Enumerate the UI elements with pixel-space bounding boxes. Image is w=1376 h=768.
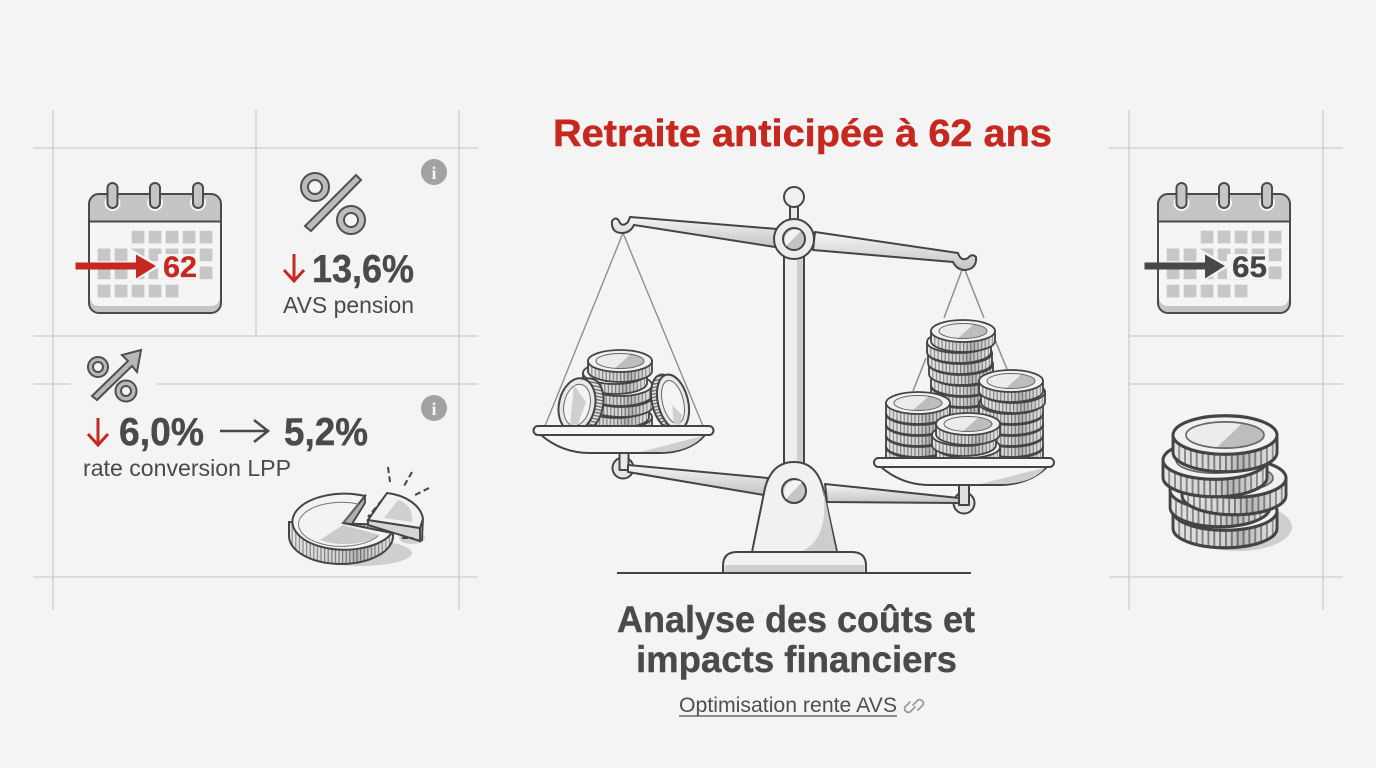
icon: red down arrow (88, 418, 108, 445)
right strings (913, 270, 1007, 391)
arrow to 62 (76, 249, 161, 283)
link text: Optimisation rente AVS (679, 694, 897, 717)
infographic canvas (33, 110, 1343, 717)
base line (617, 572, 971, 574)
upper beam right (813, 232, 976, 270)
left pan coins (557, 349, 690, 425)
panel: LPP conversion rate (83, 350, 447, 566)
icon: info: i (431, 163, 437, 183)
value 13,6%: 13,6% (312, 248, 414, 291)
heading: analysis (617, 599, 975, 680)
panel: calendar age 65 (1144, 183, 1290, 313)
heading: analysis: Analyse des coûts et (617, 599, 975, 640)
arrow between rates (220, 420, 268, 442)
lower beam right (825, 484, 974, 514)
left grid frame (33, 110, 478, 610)
icon: red down arrow (284, 254, 304, 281)
icon: info (421, 395, 447, 421)
lower beam left (612, 452, 768, 495)
label rate conversion LPP: rate conversion LPP (83, 455, 291, 481)
top knob (784, 187, 804, 223)
left stack (886, 392, 950, 468)
panel: calendar age 62 (76, 183, 221, 313)
upper beam left (612, 217, 777, 247)
balance scale (534, 187, 1054, 573)
value 5,2%: 5,2% (284, 411, 368, 454)
value 6,0%: 6,0% (119, 411, 204, 454)
panel: AVS pension reduction (283, 159, 447, 318)
left pan (534, 426, 714, 453)
left strings (545, 233, 703, 426)
right grid frame (1109, 110, 1343, 610)
right pan coins (886, 320, 1045, 468)
icon: large coin stack (1163, 416, 1292, 551)
icon: percent with rising arrow (88, 350, 141, 402)
icon: link (905, 700, 923, 712)
icon: coin pie chart with slice (289, 467, 429, 566)
number 65: 65 (1232, 251, 1267, 284)
right pan (874, 458, 1054, 485)
icon: info (421, 159, 447, 185)
back centre stack (927, 320, 995, 462)
icon: percent (301, 173, 365, 234)
central hub (774, 219, 814, 259)
front stack (932, 413, 1000, 468)
pedestal (723, 462, 866, 573)
number 62: 62 (163, 251, 197, 284)
column (784, 255, 804, 465)
right stack (979, 370, 1045, 468)
arrow to 65 (1144, 249, 1230, 283)
heading: analysis: impacts financiers (636, 639, 957, 680)
title: Retraite anticipée à 62 ans (553, 113, 1052, 155)
icon: info: i (431, 399, 437, 419)
label AVS pension: AVS pension (283, 292, 414, 318)
